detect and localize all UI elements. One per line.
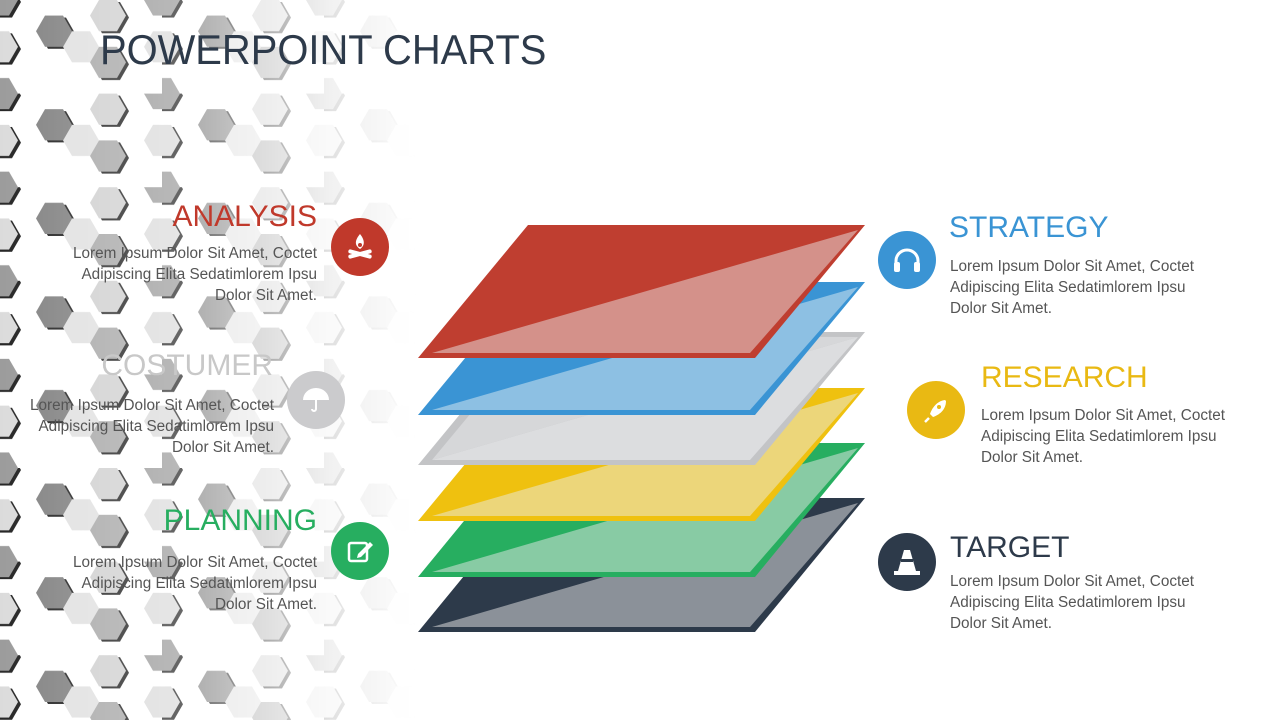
text: research [981, 407, 1225, 466]
layer: red [418, 225, 865, 358]
text: target: Lorem Ipsum Dolor Sit Amet, Coctet [950, 573, 1194, 590]
text: costumer: Dolor Sit Amet. [172, 439, 274, 456]
text: analysis: Dolor Sit Amet. [215, 287, 317, 304]
layer: gray [418, 332, 865, 465]
text: analysis: Lorem Ipsum Dolor Sit Amet, Coctet [73, 245, 317, 262]
layer: dark [418, 498, 865, 632]
icon: edit [331, 522, 389, 580]
text: research: Adipiscing Elita Sedatimlorem Ipsu [981, 428, 1217, 445]
text: planning: Lorem Ipsum Dolor Sit Amet, Coctet [73, 554, 317, 571]
icon: rocket [907, 381, 965, 439]
heading: analysis: ANALYSIS [172, 200, 317, 233]
panel: analysis [73, 200, 389, 304]
text: planning: Adipiscing Elita Sedatimlorem Ipsu [81, 575, 317, 592]
title: POWERPOINT CHARTS [100, 26, 546, 73]
background: hexagon pattern [0, 0, 395, 720]
text: planning [73, 554, 317, 613]
icon: traffic cone [878, 533, 936, 591]
text: costumer: Lorem Ipsum Dolor Sit Amet, Coctet [30, 397, 274, 414]
layer: green [418, 443, 865, 577]
heading: research: RESEARCH [981, 361, 1148, 394]
icon: umbrella [287, 371, 345, 429]
text: costumer [30, 397, 274, 456]
icon: headphones [878, 231, 936, 289]
panel: target [878, 531, 1194, 632]
layer: yellow [418, 388, 865, 521]
text: strategy [950, 258, 1194, 317]
text: planning: Dolor Sit Amet. [215, 596, 317, 613]
heading: costumer: COSTUMER [101, 349, 273, 382]
text: costumer: Adipiscing Elita Sedatimlorem Ipsu [38, 418, 274, 435]
panel: research [907, 361, 1225, 466]
text: target: Dolor Sit Amet. [950, 615, 1052, 632]
text: analysis: Adipiscing Elita Sedatimlorem Ipsu [81, 266, 317, 283]
icon: campfire [331, 218, 389, 276]
panel: strategy [878, 211, 1194, 317]
text: target [950, 573, 1194, 632]
text: strategy: Dolor Sit Amet. [950, 300, 1052, 317]
panel: costumer [30, 349, 345, 456]
text: research: Lorem Ipsum Dolor Sit Amet, Coctet [981, 407, 1225, 424]
text: research: Dolor Sit Amet. [981, 449, 1083, 466]
text: strategy: Adipiscing Elita Sedatimlorem Ipsu [950, 279, 1186, 296]
layer: blue [418, 282, 865, 415]
heading: target: TARGET [950, 531, 1069, 564]
heading: strategy: STRATEGY [949, 211, 1108, 244]
text: analysis [73, 245, 317, 304]
panel: planning [73, 504, 389, 613]
text: strategy: Lorem Ipsum Dolor Sit Amet, Coctet [950, 258, 1194, 275]
text: target: Adipiscing Elita Sedatimlorem Ipsu [950, 594, 1186, 611]
heading: planning: PLANNING [164, 504, 317, 537]
